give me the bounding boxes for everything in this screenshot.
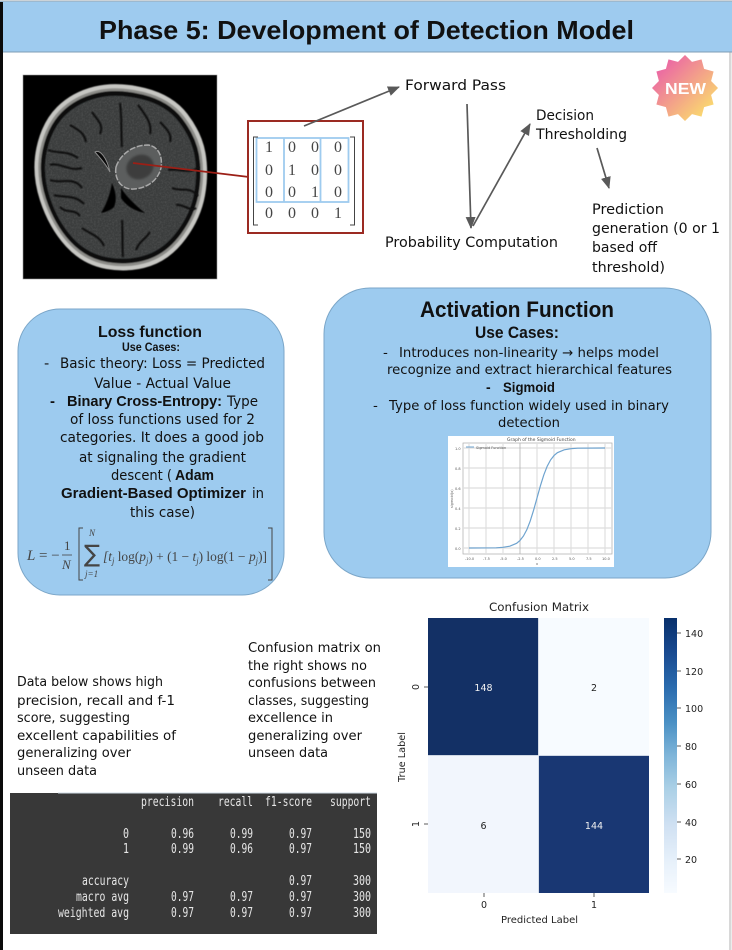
chart: sigmoid function graph: 0.0 xyxy=(535,557,541,561)
table: classification report: accuracy xyxy=(82,874,129,889)
table: classification report: 0 xyxy=(123,827,129,842)
colorbar: 40 xyxy=(685,818,697,829)
equation: binary cross-entropy: L xyxy=(26,548,35,564)
table: classification report: precision xyxy=(141,795,194,810)
table: classification report: 0.96 xyxy=(171,827,194,842)
label: prediction generation xyxy=(592,202,720,276)
subheading: use cases: Use Cases: xyxy=(475,323,559,342)
label: decision thresholding xyxy=(535,108,627,143)
heatmap cells xyxy=(428,618,649,893)
equation: binary cross-entropy: j xyxy=(111,556,115,566)
equation: binary cross-entropy: N xyxy=(61,557,72,572)
text block: activation description: recognize and extract hierarchical features xyxy=(387,362,672,378)
equation: binary cross-entropy: t xyxy=(193,550,196,565)
text block: loss description: Gradient-Based Optimizer xyxy=(61,485,246,502)
equation: binary cross-entropy: j=1 xyxy=(84,569,98,579)
heatmap cells: 6 xyxy=(480,821,487,832)
chart: sigmoid function graph: -2.5 xyxy=(517,557,524,561)
text block: classification report note: unseen data xyxy=(17,764,97,779)
text block: confusion matrix note: generalizing over xyxy=(248,729,363,744)
panel: activation function xyxy=(324,288,711,578)
chart: sigmoid function graph: 0.4 xyxy=(455,507,461,511)
equation: binary cross-entropy: )] xyxy=(258,550,267,565)
matrix box: 0 xyxy=(288,139,296,156)
chart: sigmoid function graph: x xyxy=(536,562,538,566)
chart: sigmoid function graph: 0.2 xyxy=(455,527,461,531)
label: prediction generation: Prediction xyxy=(592,202,664,218)
chart: sigmoid function graph: -7.5 xyxy=(483,557,490,561)
text block: loss description: Type xyxy=(226,394,258,410)
table: classification report: 0.99 xyxy=(230,827,253,842)
panel: loss function xyxy=(18,309,284,595)
matrix box xyxy=(248,121,363,233)
text block: confusion matrix note: classes, suggesting xyxy=(248,694,369,709)
matrix box: 0 xyxy=(265,205,273,222)
chart title: Confusion Matrix xyxy=(489,600,589,614)
colorbar: 80 xyxy=(685,742,697,753)
colorbar: 20 xyxy=(685,855,697,866)
axes labels and ticks: Predicted Label xyxy=(501,915,578,926)
table: classification report: f1-score xyxy=(265,795,312,810)
table: classification report: 1 xyxy=(123,842,129,857)
table: classification report: weighted avg xyxy=(58,906,129,921)
header band with title xyxy=(0,1,732,52)
axes labels and ticks: 1 xyxy=(591,900,597,911)
matrix box: 0 xyxy=(334,139,342,156)
text block: confusion matrix note: the right shows no xyxy=(248,659,367,674)
text block: classification report note xyxy=(17,675,176,779)
table: classification report xyxy=(10,793,377,934)
text block: loss description: - xyxy=(44,356,49,372)
text block: loss description: of loss functions used for 2 xyxy=(70,412,255,428)
matrix box: 0 xyxy=(288,184,296,201)
chart: sigmoid function graph: -10.0 xyxy=(465,557,474,561)
text block: activation description: detection xyxy=(498,415,560,431)
chart: sigmoid function graph: 5.0 xyxy=(569,557,575,561)
table: classification report: 150 xyxy=(353,842,371,857)
text block: classification report note: Data below shows high xyxy=(17,675,163,690)
chart: sigmoid function graph: 0.0 xyxy=(455,547,461,551)
text block: activation description: - xyxy=(383,345,388,361)
equation: binary cross-entropy: j xyxy=(195,556,199,566)
text block: loss description: Adam xyxy=(175,467,214,484)
arrow: forward pass to probability xyxy=(467,104,471,228)
text block: activation description: Introduces non-linearity → helps model xyxy=(399,345,659,361)
table: classification report: 0.97 xyxy=(171,906,194,921)
text block: classification report note: precision, recall and f-1 xyxy=(17,694,175,709)
chart: sigmoid function graph: sigmoid(x) xyxy=(450,489,454,508)
colorbar xyxy=(664,618,703,893)
table: classification report: 0.97 xyxy=(289,874,312,889)
equation: binary cross-entropy: p xyxy=(139,550,146,565)
axes labels and ticks: 1 xyxy=(411,821,422,827)
table: classification report: 0.97 xyxy=(230,890,253,905)
chart: confusion matrix heatmap xyxy=(397,600,703,926)
text block: loss description: at signaling the gradient xyxy=(79,450,246,466)
equation: binary cross-entropy xyxy=(26,528,272,580)
text block: loss description: - xyxy=(50,393,55,410)
subheading: use cases: Use Cases: xyxy=(122,342,180,354)
matrix box: 0 xyxy=(311,139,319,156)
chart: sigmoid function graph: 7.5 xyxy=(586,557,592,561)
text block: loss description: Value - Actual Value xyxy=(94,376,231,392)
chart: sigmoid function graph: 1.0 xyxy=(455,447,461,451)
line: connector from tumor to matrix xyxy=(133,163,249,177)
arrow: matrix to forward pass xyxy=(304,87,399,126)
text block: confusion matrix note: Confusion matrix on xyxy=(248,641,381,656)
text block: classification report note: generalizing over xyxy=(17,746,132,761)
chart: sigmoid function graph: 0.8 xyxy=(455,467,461,471)
axes labels and ticks xyxy=(397,684,597,926)
equation: binary cross-entropy: p xyxy=(249,550,256,565)
colorbar: 100 xyxy=(685,704,703,715)
text block: loss description: this case) xyxy=(130,505,195,521)
text block: activation description: Type of loss function widely used in binary xyxy=(388,398,669,414)
text block: classification report note: excellent capabilities of xyxy=(17,729,176,744)
matrix box: 0 xyxy=(265,162,273,179)
table: classification report: 0.97 xyxy=(289,827,312,842)
table: classification report: 0.97 xyxy=(289,890,312,905)
text block: confusion matrix note: confusions between xyxy=(248,676,376,691)
equation: binary cross-entropy: j xyxy=(255,556,259,566)
heatmap cells: 2 xyxy=(591,683,597,694)
heatmap cells: 144 xyxy=(585,821,603,832)
text block: activation description: - xyxy=(373,398,378,414)
colorbar: 60 xyxy=(685,780,697,791)
badge: NEW xyxy=(652,55,718,121)
equation: binary cross-entropy: j xyxy=(145,556,149,566)
arrow: decision to prediction xyxy=(597,148,609,188)
label: prediction generation: threshold) xyxy=(592,260,665,276)
equation: binary cross-entropy: = − xyxy=(39,548,60,564)
axes labels and ticks: 0 xyxy=(481,900,487,911)
matrix box: 1 xyxy=(334,205,342,222)
text block: loss description: Binary Cross-Entropy: xyxy=(67,393,222,410)
chart: sigmoid function graph: 10.0 xyxy=(602,557,610,561)
label: prediction generation: based off xyxy=(592,240,658,256)
table: classification report: macro avg xyxy=(76,890,129,905)
header band with title: Phase 5: Development of Detection Model xyxy=(99,15,634,45)
matrix box: 0 xyxy=(334,162,342,179)
table: classification report: 0.99 xyxy=(171,842,194,857)
equation: binary cross-entropy: 1 xyxy=(64,538,70,553)
chart: sigmoid function graph: Sigmoid Function xyxy=(476,446,506,450)
text block: confusion matrix note: excellence in xyxy=(248,711,333,726)
equation: binary cross-entropy: ) log(1 − xyxy=(199,550,249,565)
matrix box: 0 xyxy=(334,184,342,201)
colorbar: 140 xyxy=(685,629,703,640)
chart: sigmoid function graph: -5.0 xyxy=(500,557,507,561)
heading: loss function: Loss function xyxy=(98,324,202,341)
chart: sigmoid function graph: 0.6 xyxy=(455,487,461,491)
label: forward pass: Forward Pass xyxy=(405,78,506,94)
label: decision thresholding: Thresholding xyxy=(535,127,627,143)
equation: binary cross-entropy: N xyxy=(88,528,96,538)
heatmap cells: 148 xyxy=(474,683,493,694)
image: brain MRI scan xyxy=(23,75,217,279)
matrix box: 0 xyxy=(311,205,319,222)
arrow: probability to decision xyxy=(473,124,530,226)
chart: sigmoid function graph xyxy=(448,436,614,567)
label: decision thresholding: Decision xyxy=(536,108,594,124)
matrix box: 0 xyxy=(288,205,296,222)
axes labels and ticks: True Label xyxy=(397,732,408,783)
table: classification report: 300 xyxy=(353,874,371,889)
equation: binary cross-entropy: log( xyxy=(114,550,140,565)
label: probability computation: Probability Computation xyxy=(385,235,558,251)
matrix box: 1 xyxy=(288,162,296,179)
equation: binary cross-entropy: ∑ xyxy=(84,540,100,568)
table: classification report: 150 xyxy=(353,827,371,842)
axes labels and ticks: 0 xyxy=(411,684,422,690)
table: classification report: recall xyxy=(218,795,253,810)
table: classification report: 0.97 xyxy=(230,906,253,921)
table: classification report: 0.97 xyxy=(289,842,312,857)
matrix box: 1 xyxy=(311,184,319,201)
matrix box: 0 xyxy=(265,184,273,201)
table: classification report: 0.97 xyxy=(171,890,194,905)
text block: activation description: - xyxy=(486,379,491,395)
chart: sigmoid function graph: Graph of the Sigmoid Function xyxy=(507,437,576,443)
label: prediction generation: generation (0 or 1 xyxy=(592,221,720,237)
equation: binary cross-entropy: ) + (1 − xyxy=(148,550,193,565)
text block: activation description: Sigmoid xyxy=(503,379,555,395)
matrix box: 1 xyxy=(265,139,273,156)
table: classification report: 300 xyxy=(353,890,371,905)
colorbar: 120 xyxy=(685,667,703,678)
text block: loss description: in xyxy=(252,486,264,502)
text block: loss description: Basic theory: Loss = Predicted xyxy=(60,356,265,372)
badge: NEW: NEW xyxy=(665,81,707,98)
table: classification report: 300 xyxy=(353,906,371,921)
text block: classification report note: score, suggesting xyxy=(17,711,130,726)
table: classification report: 0.96 xyxy=(230,842,253,857)
matrix box: 0 xyxy=(311,162,319,179)
table: classification report: support xyxy=(330,795,371,810)
chart: sigmoid function graph: 2.5 xyxy=(552,557,558,561)
text block: confusion matrix note: unseen data xyxy=(248,746,328,761)
text block: loss description: descent ( xyxy=(111,468,172,484)
text block: loss description: categories. It does a good job xyxy=(60,430,264,446)
heading: activation function: Activation Function xyxy=(420,297,614,322)
equation: binary cross-entropy: [t xyxy=(103,550,112,565)
text block: activation description xyxy=(373,345,672,431)
table: classification report: 0.97 xyxy=(289,906,312,921)
text block: loss description xyxy=(44,356,265,521)
text block: confusion matrix note xyxy=(248,641,381,761)
